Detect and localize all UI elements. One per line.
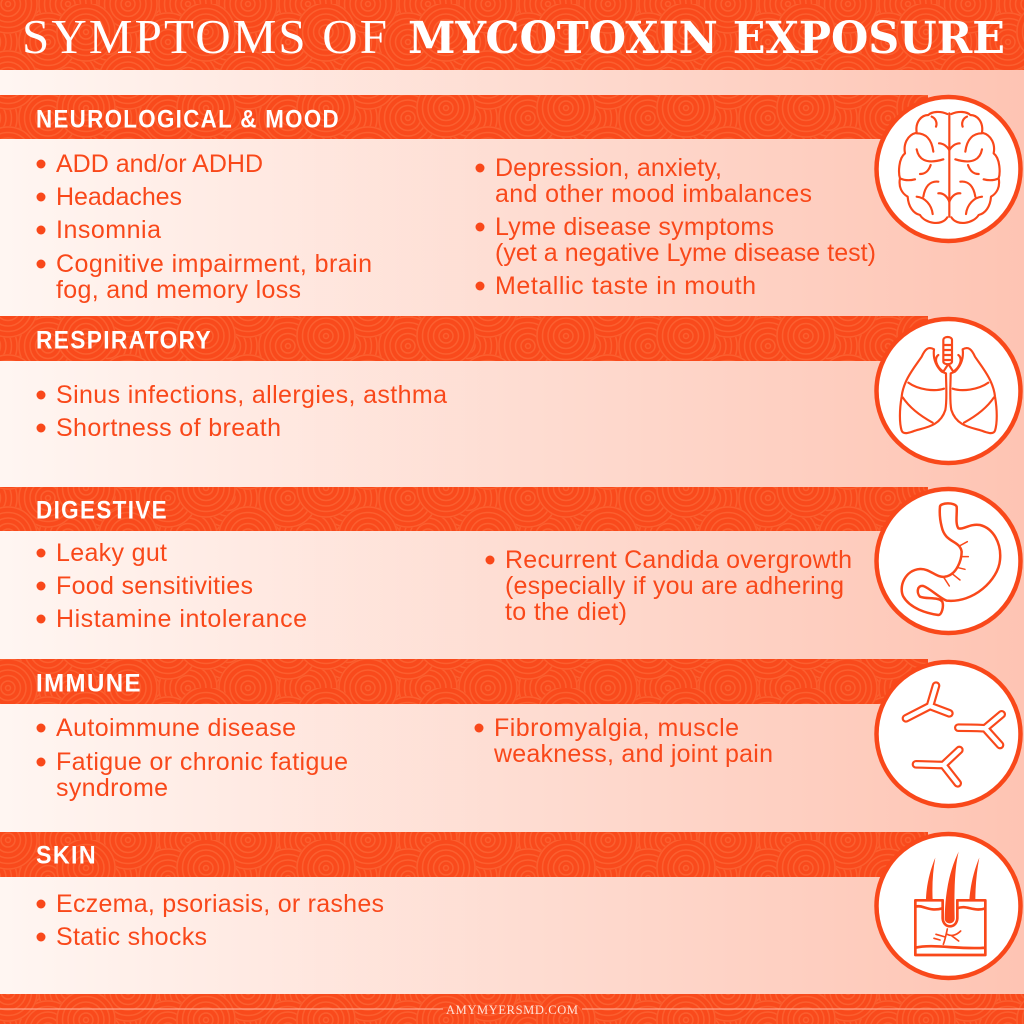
panel: immune bbox=[0, 659, 1020, 806]
symptom list: Shortness of breath bbox=[56, 414, 281, 442]
title bbox=[22, 9, 1005, 64]
symptom list left: Autoimmune disease bbox=[56, 714, 296, 742]
symptom list: Eczema, psoriasis, or rashes bbox=[56, 890, 384, 918]
symptom list right: (yet a negative Lyme disease test) bbox=[495, 239, 876, 267]
footer band bbox=[0, 994, 1024, 1024]
symptom list right bbox=[486, 546, 852, 626]
panel: respiratory bbox=[0, 316, 1020, 463]
symptom list left: fog, and memory loss bbox=[56, 276, 301, 304]
panel: neurological and mood bbox=[0, 95, 1020, 304]
symptom list left: Headaches bbox=[56, 183, 182, 211]
heading: neurological and mood: NEUROLOGICAL & MOOD bbox=[36, 106, 340, 134]
symptom list left bbox=[36, 539, 307, 633]
symptom list right: and other mood imbalances bbox=[495, 180, 812, 208]
title: MYCOTOXIN EXPOSURE bbox=[408, 13, 1005, 64]
icon: stomach bbox=[876, 489, 1020, 633]
symptom list left: Cognitive impairment, brain bbox=[56, 250, 372, 278]
symptom list right: weakness, and joint pain bbox=[493, 740, 773, 768]
icon: brain bbox=[876, 97, 1020, 241]
symptom list bbox=[36, 381, 447, 442]
symptom list right: Metallic taste in mouth bbox=[495, 272, 756, 300]
title: SYMPTOMS OF bbox=[22, 9, 387, 64]
heading: skin: SKIN bbox=[36, 842, 97, 870]
symptom list right: Fibromyalgia, muscle bbox=[494, 714, 739, 742]
symptom list left: Leaky gut bbox=[56, 539, 167, 567]
icon: lungs bbox=[876, 319, 1020, 463]
symptom list right: Depression, anxiety, bbox=[495, 154, 722, 182]
symptom list left: syndrome bbox=[56, 774, 168, 802]
symptom list right: Lyme disease symptoms bbox=[495, 213, 774, 241]
icon: skin and hair follicle bbox=[876, 834, 1020, 978]
symptom list bbox=[36, 890, 384, 951]
symptom list: Sinus infections, allergies, asthma bbox=[56, 381, 447, 409]
symptom list right: to the diet) bbox=[505, 598, 627, 626]
symptom list left: Food sensitivities bbox=[56, 572, 253, 600]
symptom list left bbox=[36, 150, 372, 304]
title banner bbox=[0, 0, 1024, 70]
symptom list left: Insomnia bbox=[56, 216, 161, 244]
symptom list right bbox=[476, 154, 876, 300]
icon: antibodies bbox=[876, 662, 1020, 806]
heading: immune: IMMUNE bbox=[36, 670, 142, 698]
symptom list left: ADD and/or ADHD bbox=[56, 150, 263, 178]
symptom list right bbox=[474, 714, 773, 768]
panel: skin bbox=[0, 832, 1020, 978]
symptom list right: (especially if you are adhering bbox=[505, 572, 844, 600]
symptom list right: Recurrent Candida overgrowth bbox=[505, 546, 852, 574]
panel: digestive bbox=[0, 487, 1020, 633]
heading: digestive: DIGESTIVE bbox=[36, 496, 168, 524]
symptom list left bbox=[36, 714, 348, 802]
symptom list left: Fatigue or chronic fatigue bbox=[56, 748, 348, 776]
symptom list left: Histamine intolerance bbox=[56, 605, 307, 633]
footer website: AMYMYERSMD.COM bbox=[446, 1003, 578, 1017]
heading: respiratory: RESPIRATORY bbox=[36, 326, 212, 354]
symptom list: Static shocks bbox=[56, 923, 207, 951]
